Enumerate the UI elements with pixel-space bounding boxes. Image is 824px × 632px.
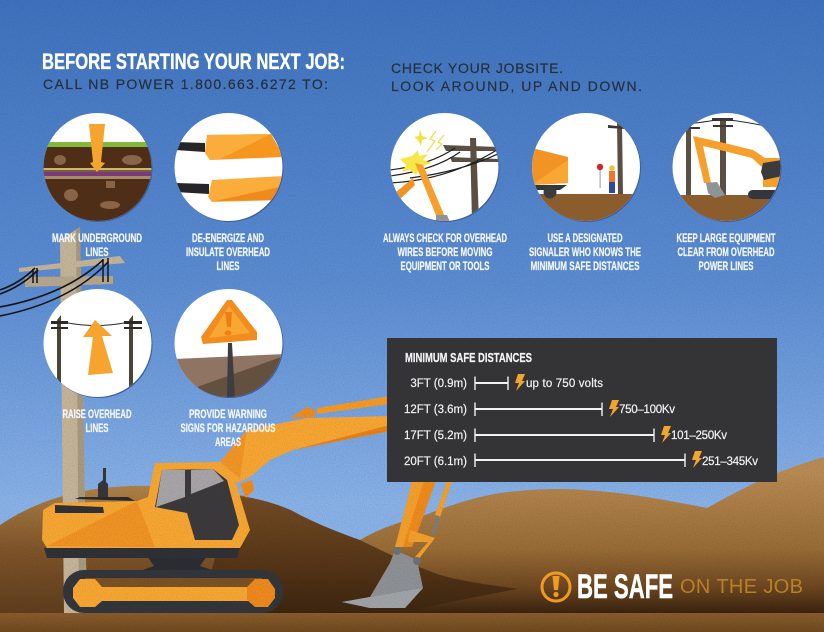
heading: check your jobsite	[391, 60, 642, 94]
subtitle: phone number: CALL NB POWER 1.800.663.6272 TO:	[43, 76, 328, 92]
label: warning signs: PROVIDE WARNING	[189, 409, 267, 421]
panel heading: MINIMUM SAFE DISTANCES	[405, 351, 532, 365]
label: de-energize and insulate: INSULATE OVERHEAD	[186, 247, 270, 259]
row: 17ft: 101–250Kv	[671, 430, 727, 442]
label: check overhead wires: WIRES BEFORE MOVING	[398, 247, 493, 259]
label: de-energize and insulate	[186, 233, 270, 273]
label: keep equipment clear: CLEAR FROM OVERHEAD	[678, 247, 774, 259]
panel: minimum safe distances	[387, 338, 777, 482]
label: mark underground lines: LINES	[86, 247, 109, 259]
row: 17ft: 17FT (5.2m)	[404, 430, 467, 442]
row: 12ft: 750–100Kv	[619, 404, 675, 416]
row: 12ft	[404, 400, 675, 417]
row: 20ft: 251–345Kv	[702, 456, 758, 468]
label: signaler: MINIMUM SAFE DISTANCES	[530, 261, 640, 273]
title: BEFORE STARTING YOUR NEXT JOB:	[42, 49, 345, 74]
label: check overhead wires: EQUIPMENT OR TOOLS	[400, 261, 490, 273]
icon: warning sign	[174, 289, 284, 399]
label: keep equipment clear: KEEP LARGE EQUIPMENT	[676, 233, 776, 245]
icon: keep equipment clear	[672, 112, 782, 223]
row: 12ft: 12FT (3.6m)	[404, 404, 467, 416]
label: check overhead wires: ALWAYS CHECK FOR OVERHEAD	[383, 233, 507, 245]
label: mark underground lines: MARK UNDERGROUND	[52, 233, 142, 245]
icon: exclamation ring	[542, 573, 570, 601]
label: raise overhead lines: RAISE OVERHEAD	[62, 409, 132, 421]
excavator boom	[220, 396, 390, 498]
label: keep equipment clear: POWER LINES	[698, 261, 754, 273]
logo: be safe on the job	[542, 568, 803, 606]
icon: mark underground lines	[43, 113, 153, 223]
row: 20ft: 20FT (6.1m)	[404, 456, 467, 468]
label: warning signs: SIGNS FOR HAZARDOUS	[180, 423, 276, 435]
logo: be safe on the job: BE SAFE	[577, 568, 673, 606]
icon: raise overhead lines	[43, 289, 153, 400]
label: raise overhead lines	[62, 409, 132, 435]
label: keep equipment clear	[676, 233, 776, 273]
label: warning signs: AREAS	[215, 437, 241, 449]
excavator cab window	[155, 469, 239, 540]
label: de-energize and insulate: LINES	[216, 261, 240, 273]
label: signaler: USE A DESIGNATED	[548, 233, 622, 245]
logo: be safe on the job: ON THE JOB	[680, 576, 803, 598]
icon: de-energize and insulate	[174, 113, 284, 223]
heading: check your jobsite: LOOK AROUND, UP AND DOWN.	[391, 78, 642, 94]
label: warning signs	[180, 409, 276, 449]
label: signaler: SIGNALER WHO KNOWS THE	[529, 247, 641, 259]
landscape: hills and ground	[0, 457, 824, 632]
excavator arm and bucket	[342, 478, 453, 608]
excavator undercarriage and tracks	[44, 548, 283, 613]
heading: check your jobsite: CHECK YOUR JOBSITE.	[391, 60, 563, 76]
row: 17ft	[404, 426, 727, 443]
icon: check overhead wires	[390, 112, 500, 222]
row: 3ft	[410, 374, 603, 391]
label: signaler	[529, 233, 641, 273]
excavator	[42, 396, 453, 613]
label: raise overhead lines: LINES	[86, 423, 109, 435]
icon: signaler	[532, 112, 642, 224]
row: 20ft	[404, 451, 758, 468]
label: mark underground lines	[52, 233, 142, 259]
excavator body	[42, 462, 250, 548]
label: check overhead wires	[383, 233, 507, 273]
row: 3ft: 3FT (0.9m)	[410, 378, 467, 390]
utility pole with crossarms and wires	[0, 227, 125, 613]
row: 3ft: up to 750 volts	[526, 378, 603, 390]
label: de-energize and insulate: DE-ENERGIZE AND	[192, 233, 264, 245]
